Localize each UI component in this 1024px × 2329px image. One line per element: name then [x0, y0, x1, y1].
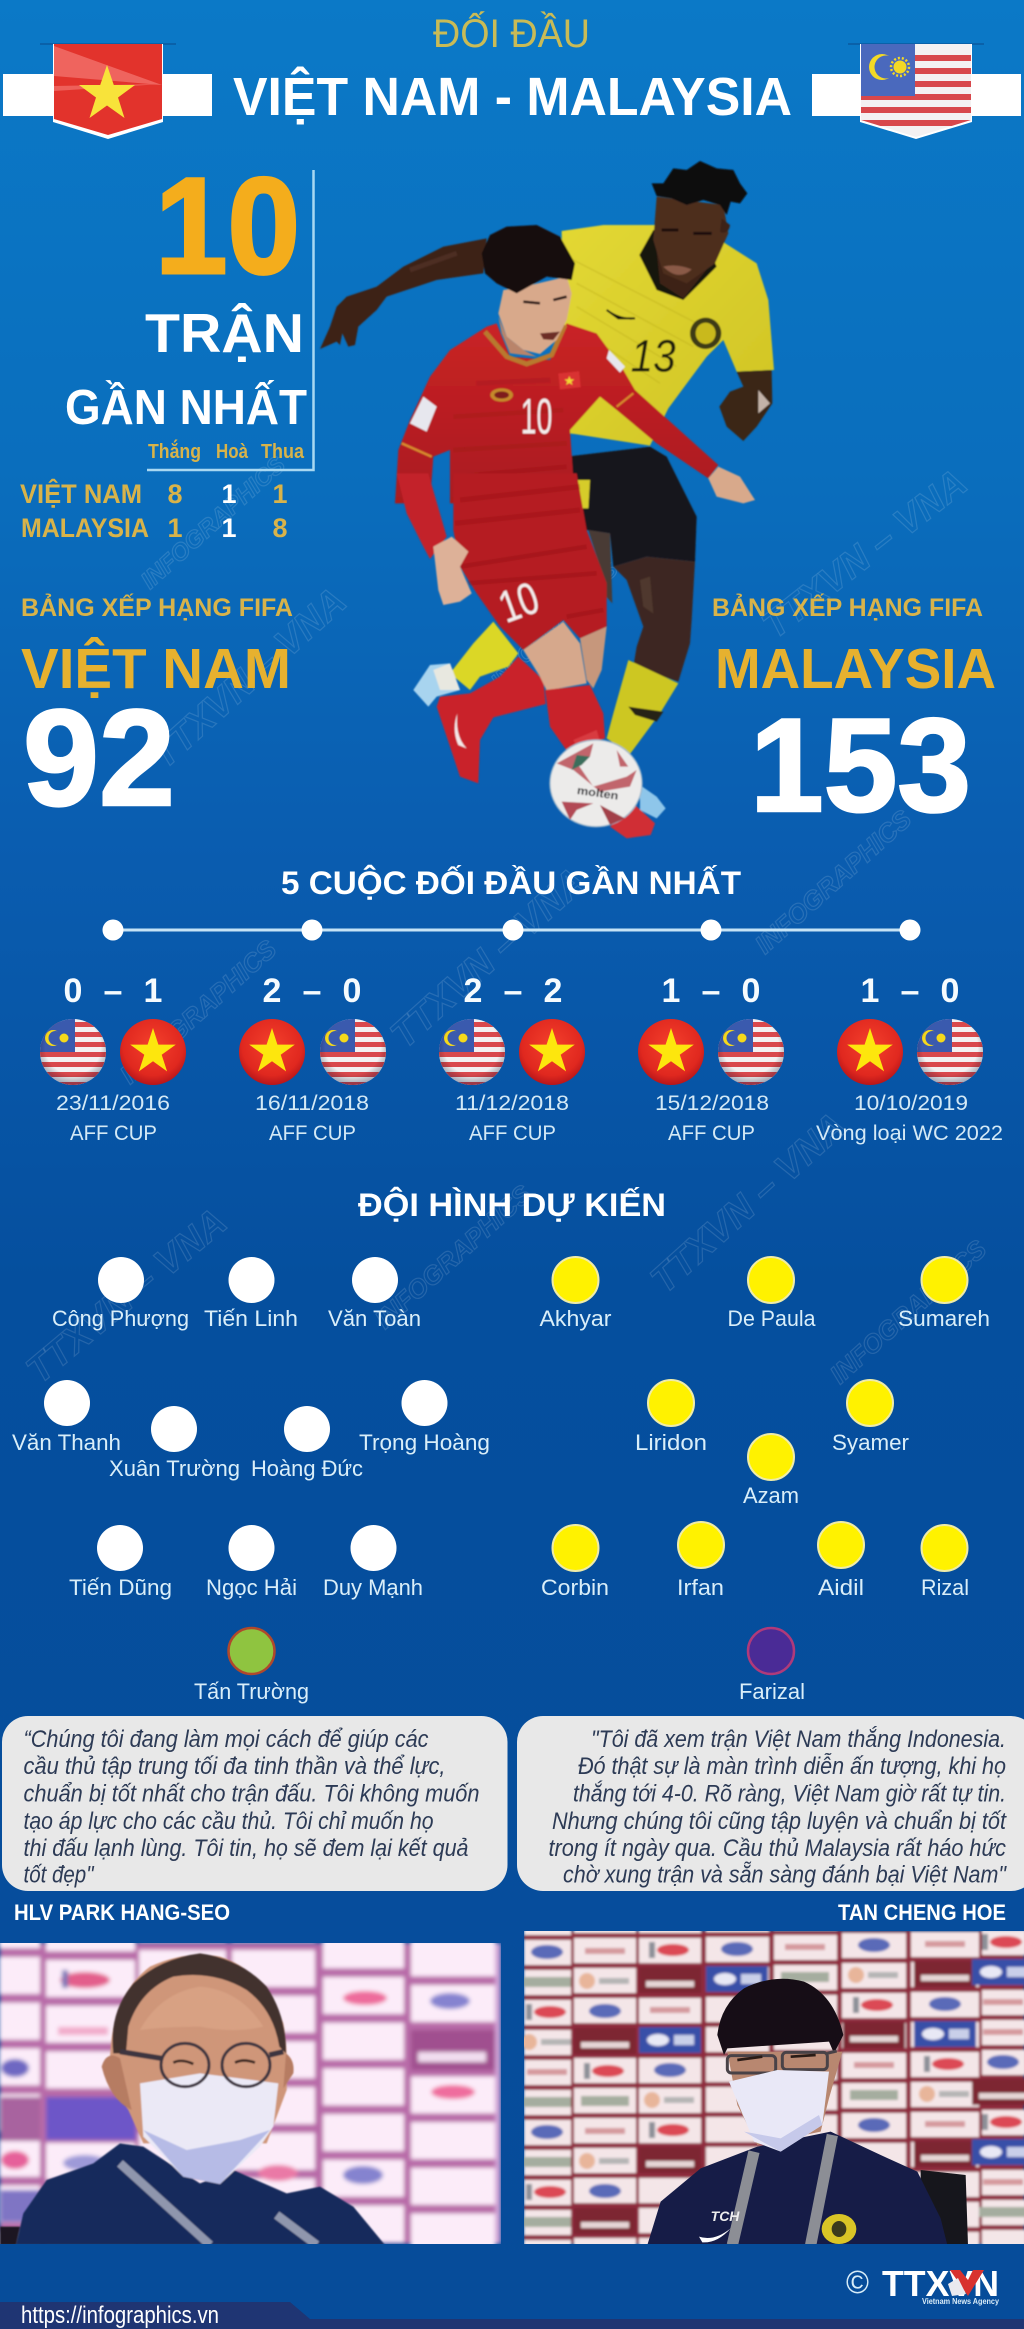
illustration: two football players with ball: 13: [631, 331, 676, 382]
icon: Vietnam flag: [837, 1019, 903, 1085]
coach face mask: [729, 2070, 829, 2152]
player names: [540, 1306, 990, 1704]
player names: Farizal: [739, 1679, 805, 1704]
quote bubble: Park Hang-seo: chuẩn bị tốt nhất cho trận đấu. Tôi không muốn: [24, 1780, 480, 1808]
player names: De Paula: [728, 1306, 816, 1331]
icon: Malaysia flag: [320, 1019, 386, 1086]
player names: Văn Thanh: [12, 1430, 121, 1455]
column headers: Hoà: [216, 441, 249, 463]
score: 2 – 0: [263, 972, 361, 1010]
player names: Trọng Hoàng: [359, 1430, 490, 1455]
text: INFOGRAPHICS: [114, 933, 283, 1089]
match 4: [638, 972, 784, 1145]
coach glasses: [727, 2051, 837, 2073]
rank number: 92: [23, 682, 175, 835]
match 2: [239, 972, 386, 1145]
competition: Vòng loại WC 2022: [816, 1122, 1003, 1145]
text: INFOGRAPHICS: [486, 556, 623, 694]
competition: AFF CUP: [269, 1122, 356, 1145]
heading: Gần nhất: GẦN NHẤT: [65, 381, 307, 435]
text: TTXVN – VNA: [19, 1201, 235, 1392]
results table: 1: [272, 479, 288, 509]
text: TTXVN – VNA: [755, 462, 975, 647]
player names: Liridon: [635, 1430, 707, 1455]
player names: Sumareh: [898, 1306, 990, 1331]
quote bubble: Park Hang-seo: [2, 1716, 508, 1891]
Malaysia forearm lower: [588, 530, 612, 603]
icon: Vietnam flag: [519, 1019, 585, 1085]
FIFA label: BẢNG XẾP HẠNG FIFA: [21, 592, 293, 622]
Malaysia head: [653, 197, 728, 283]
results table: 1: [221, 479, 237, 509]
results table: VIỆT NAM: [20, 478, 142, 509]
heading: expected lineups: ĐỘI HÌNH DỰ KIẾN: [358, 1187, 666, 1223]
player names: Xuân Trường: [109, 1456, 240, 1481]
quote bubble: Park Hang-seo: tạo áp lực cho các cầu thủ. Tôi chỉ muốn họ: [24, 1808, 434, 1835]
panel: 10 matches: [20, 150, 314, 543]
logo: TTXVN: ©: [846, 2264, 869, 2300]
player names: Tấn Trường: [194, 1679, 309, 1704]
Malaysia shorts: [567, 447, 697, 567]
player names: Akhyar: [540, 1306, 612, 1331]
Vietnam front thigh: [580, 627, 607, 688]
player names: Tiến Linh: [204, 1306, 298, 1331]
Malaysia jersey: [562, 225, 774, 446]
title: VIỆT NAM - MALAYSIA: [233, 66, 792, 127]
match 1: [40, 972, 186, 1145]
Vietnam boot under ball: [610, 803, 655, 838]
quote bubble: Park Hang-seo: “Chúng tôi đang làm mọi cách để giúp các: [24, 1726, 428, 1753]
score: 2 – 2: [464, 972, 562, 1010]
icon: Vietnam flag: [239, 1019, 305, 1085]
icon: Malaysia flag: [917, 1019, 983, 1086]
Vietnam face: [498, 277, 572, 354]
goalkeeper marker: [748, 1628, 794, 1674]
competition: AFF CUP: [469, 1122, 556, 1145]
icon: Vietnam flag: [638, 1019, 704, 1085]
rank number: 153: [750, 692, 971, 840]
quote bubble: Park Hang-seo: tốt đẹp": [24, 1862, 95, 1888]
Malaysia player arm: [320, 238, 487, 349]
text: INFOGRAPHICS: [749, 803, 918, 959]
quote bubble: Park Hang-seo: thi đấu lạnh lùng. Tôi tin, họ sẽ đem lại kết quả: [24, 1835, 468, 1862]
FIFA label: BẢNG XẾP HẠNG FIFA: [712, 592, 983, 622]
results table: [20, 478, 288, 543]
score: 0 – 1: [64, 972, 162, 1010]
player names: Rizal: [921, 1575, 969, 1600]
Vietnam jersey details: [558, 371, 581, 389]
icon: Malaysia flag: [718, 1019, 784, 1086]
logo: TTXVN: TTXVN: [882, 2263, 999, 2304]
text: INFOGRAPHICS: [136, 451, 291, 594]
Malaysia back boot: [413, 663, 460, 707]
results table: 8: [272, 513, 288, 543]
country name: MALAYSIA: [715, 637, 996, 701]
text: TTXVN – VNA: [143, 580, 355, 777]
date: 10/10/2019: [854, 1092, 968, 1115]
footer band: [0, 2302, 1024, 2329]
column headers: Thắng: [148, 439, 201, 463]
website url: https://infographics.vn: [21, 2302, 219, 2329]
coach face mask: [140, 2073, 278, 2184]
player names: Duy Mạnh: [323, 1575, 423, 1600]
coach body: [647, 2132, 947, 2245]
illustration: two football players with ball: 10: [521, 388, 552, 444]
photo: coach Park Hang-seo: [0, 1943, 501, 2244]
coach chair: [921, 2170, 968, 2245]
player names: Azam: [743, 1483, 799, 1508]
results table: 1: [167, 513, 183, 543]
illustration: two football players with ball: 10: [492, 572, 545, 633]
text: TTXVN – VNA: [383, 860, 595, 1057]
Malaysia blue boot: [640, 785, 666, 818]
Malaysia sock: [607, 660, 678, 754]
panel: FIFA ranking Malaysia: [712, 592, 996, 840]
logo: TTXVN: Vietnam News Agency: [922, 2297, 999, 2306]
header: kicker: ĐỐI ĐẦU: [433, 10, 590, 56]
coach lanyard: [732, 2135, 832, 2245]
Vietnam back leg sock and boot: [437, 657, 546, 783]
results table: MALAYSIA: [21, 513, 149, 543]
heading: Trận: TRẬN: [145, 302, 304, 364]
Vietnam collar: [485, 325, 565, 364]
icon: Malaysia flag: [40, 1019, 106, 1086]
Malaysia back sock: [450, 622, 518, 690]
text: TTXVN – VNA: [643, 1105, 855, 1302]
photo: coach Tan Cheng Hoe: TCH: [711, 2208, 740, 2224]
illustration: two football players with ball: molten: [576, 785, 619, 803]
player names: Corbin: [541, 1575, 609, 1600]
player names: Irfan: [677, 1575, 724, 1600]
panel: FIFA ranking Vietnam: [21, 592, 293, 835]
date: 11/12/2018: [455, 1092, 569, 1115]
big number 10: 10: [155, 150, 300, 303]
quote bubble: Tan Cheng Hoe: [517, 1716, 1024, 1891]
Malaysia leg: [613, 557, 695, 682]
icon: Vietnam flag: [120, 1019, 186, 1085]
Malaysia collar and neck: [639, 230, 717, 300]
player names: Ngọc Hải: [206, 1575, 297, 1600]
frame line: [147, 170, 314, 470]
icon: Malaysia shield flag: [848, 43, 984, 139]
competition: AFF CUP: [668, 1122, 755, 1145]
player names: Hoàng Đức: [251, 1456, 363, 1481]
football: [550, 740, 642, 827]
text: INFOGRAPHICS: [824, 1233, 993, 1389]
text: INFOGRAPHICS: [369, 1178, 538, 1334]
date: 23/11/2016: [56, 1092, 170, 1115]
icon: Vietnam shield flag: [40, 43, 176, 139]
results table: 8: [167, 479, 183, 509]
header: white bar left: [3, 74, 212, 116]
score: 1 – 0: [662, 972, 760, 1010]
coach body: [16, 2143, 385, 2245]
Vietnam front sock: [545, 685, 605, 751]
player names: Aidil: [818, 1575, 864, 1600]
lineup: Malaysia: [540, 1257, 990, 1704]
player names: Tiến Dũng: [69, 1575, 172, 1600]
coach head and hair: [102, 1953, 294, 2143]
player names: Văn Toàn: [328, 1306, 421, 1331]
photo: coach Tan Cheng Hoe: [524, 1931, 1024, 2244]
results table: 1: [221, 513, 237, 543]
Vietnam body lower and shorts: [453, 473, 607, 650]
header: white bar right: [812, 74, 1021, 116]
timeline: [102, 920, 920, 940]
competition: AFF CUP: [70, 1122, 157, 1145]
coach name: Park Hang-seo: HLV PARK HANG-SEO: [14, 1900, 230, 1925]
column headers: Thua: [261, 441, 305, 463]
icon: Malaysia flag: [439, 1019, 505, 1086]
player names: Công Phượng: [52, 1306, 189, 1331]
match 5: [816, 972, 1003, 1145]
Malaysia forearm: [719, 370, 772, 441]
Vietnam right hand: [708, 467, 755, 503]
match 3: [439, 972, 585, 1145]
player names: Syamer: [832, 1430, 909, 1455]
Vietnam left arm: [397, 473, 447, 559]
country name: VIỆT NAM: [21, 636, 291, 701]
score: 1 – 0: [861, 972, 959, 1010]
goalkeeper marker: [228, 1628, 274, 1674]
coach head: [727, 2052, 842, 2145]
coach name: Tan Cheng Hoe: TAN CHENG HOE: [838, 1900, 1006, 1925]
Vietnam jersey: [395, 323, 718, 503]
Vietnam hair: [482, 225, 575, 293]
coach glasses: [120, 2043, 283, 2087]
date: 15/12/2018: [655, 1092, 769, 1115]
player names: [12, 1306, 490, 1704]
quote bubble: Park Hang-seo: cầu thủ tập trung tối đa tinh thần và thể lực,: [24, 1753, 446, 1780]
lineup: Vietnam: [12, 1257, 490, 1704]
illustration: two football players with ball: [320, 161, 774, 838]
date: 16/11/2018: [255, 1092, 369, 1115]
column headers: [148, 439, 305, 463]
heading: last 5 meetings: 5 CUỘC ĐỐI ĐẦU GẦN NHẤT: [281, 865, 741, 901]
